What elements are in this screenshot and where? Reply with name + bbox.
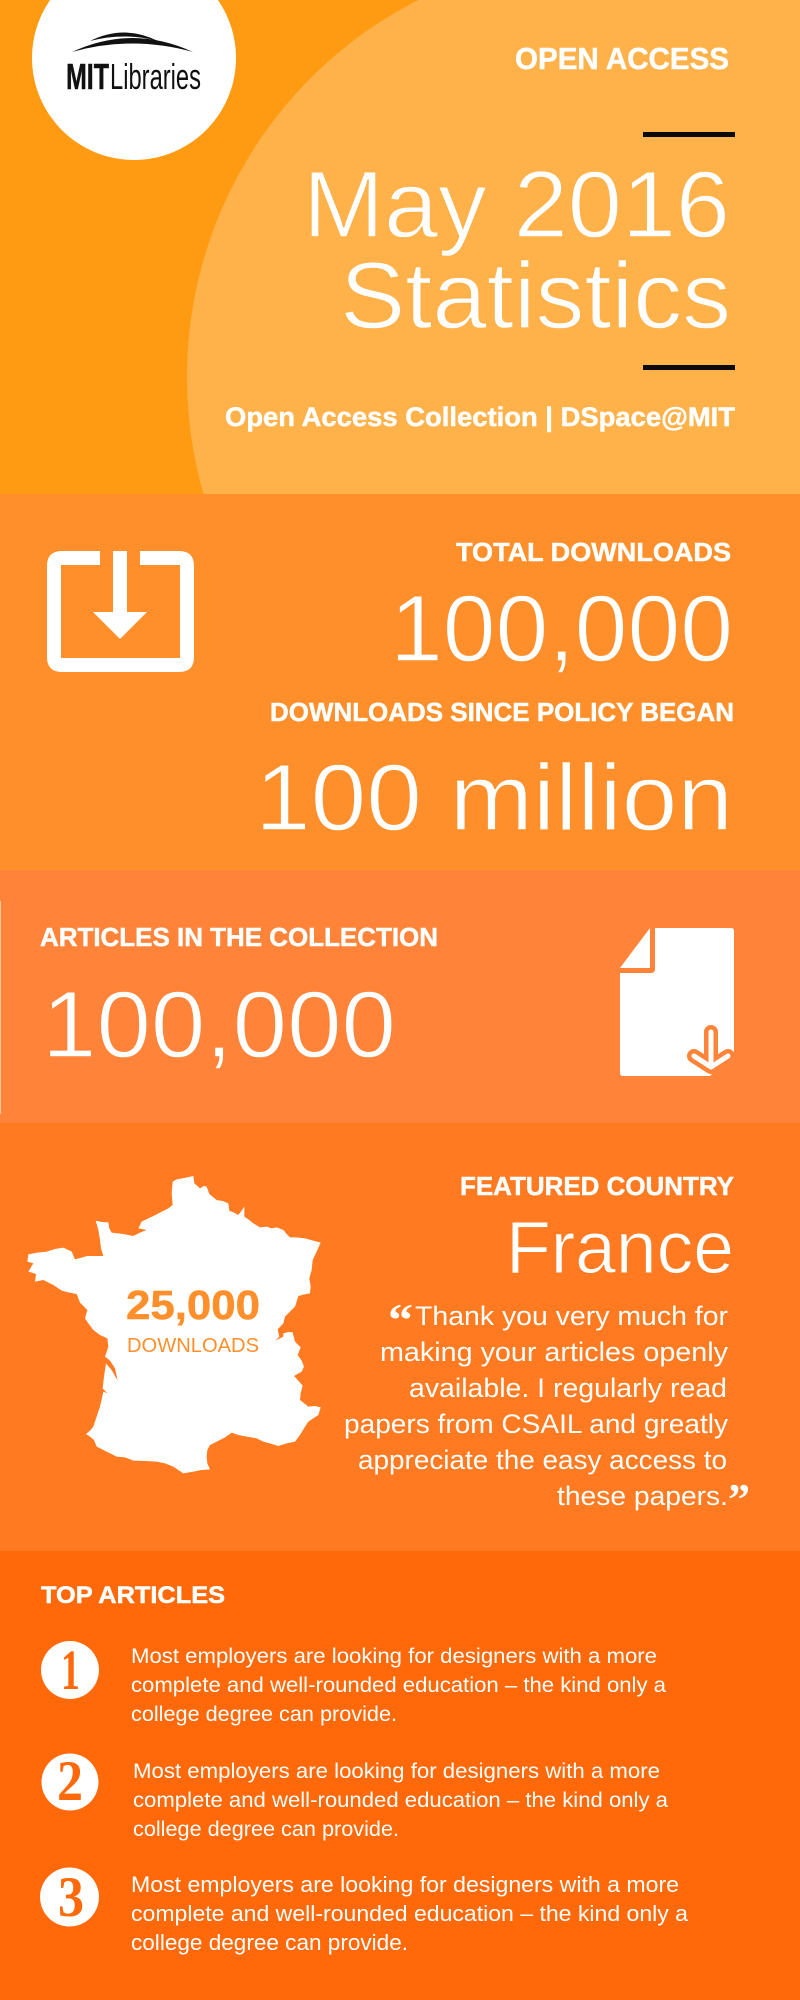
article 2: 2	[57, 1750, 83, 1813]
label: France downloads: DOWNLOADS	[127, 1334, 259, 1357]
stat: France downloads value: 25,000	[126, 1282, 260, 1328]
quote: appreciate the easy access to	[358, 1445, 727, 1475]
panel: articles in the collection	[0, 870, 800, 1123]
rule below title	[643, 365, 735, 370]
article 1: 1	[61, 1639, 80, 1702]
label: downloads since policy began: DOWNLOADS SINCE POLICY BEGAN	[270, 697, 734, 727]
quote	[344, 1294, 750, 1524]
article 2: college degree can provide.	[133, 1817, 399, 1841]
icon: download box	[47, 551, 194, 672]
article 2: complete and well-rounded education – the kind only a	[133, 1788, 668, 1812]
quote: “	[388, 1294, 413, 1345]
heading: open access: OPEN ACCESS	[515, 41, 729, 76]
panel: featured country	[0, 1123, 800, 1551]
article 1	[41, 1639, 666, 1726]
heading: top articles: TOP ARTICLES	[41, 1582, 225, 1609]
article 1: complete and well-rounded education – the kind only a	[131, 1673, 666, 1697]
panel: header	[0, 0, 800, 800]
title	[303, 152, 731, 349]
icon: document download	[620, 928, 738, 1080]
title: Statistics	[340, 243, 731, 349]
article 3: Most employers are looking for designers with a more	[131, 1872, 679, 1897]
article 3: complete and well-rounded education – the kind only a	[131, 1901, 689, 1926]
article 2: Most employers are looking for designers with a more	[133, 1759, 660, 1783]
subtitle: Open Access Collection | DSpace@MIT	[225, 402, 735, 432]
stat: total downloads value: 100,000	[390, 576, 733, 682]
article 2	[42, 1750, 668, 1841]
article 3	[40, 1866, 689, 1955]
quote: Thank you very much for	[415, 1301, 728, 1331]
article 3: 3	[58, 1866, 84, 1929]
header arc background	[187, 0, 800, 800]
stat: downloads since policy value: 100 million	[255, 745, 733, 851]
quote: making your articles openly	[380, 1337, 729, 1367]
heading: France: France	[506, 1206, 734, 1289]
quote: papers from CSAIL and greatly	[344, 1409, 729, 1439]
label: articles: ARTICLES IN THE COLLECTION	[40, 922, 438, 952]
quote: ”	[728, 1475, 750, 1524]
logo: MIT Libraries: MIT	[66, 56, 109, 97]
article 1: Most employers are looking for designers with a more	[131, 1644, 657, 1668]
article 3: college degree can provide.	[131, 1930, 408, 1955]
map: France	[27, 1176, 321, 1473]
article 1: college degree can provide.	[131, 1702, 397, 1726]
label: featured country: FEATURED COUNTRY	[460, 1171, 734, 1201]
stat: articles value: 100,000	[42, 972, 396, 1078]
quote: available. I regularly read	[409, 1373, 727, 1403]
title: May 2016	[303, 152, 730, 258]
panel: top articles	[0, 1551, 800, 2000]
rule above title	[643, 132, 735, 137]
logo: MIT Libraries: Libraries	[110, 56, 201, 97]
panel: downloads	[0, 494, 800, 870]
label: total downloads: TOTAL DOWNLOADS	[456, 537, 731, 567]
logo: MIT Libraries	[32, 0, 236, 160]
quote: these papers.	[557, 1481, 728, 1511]
